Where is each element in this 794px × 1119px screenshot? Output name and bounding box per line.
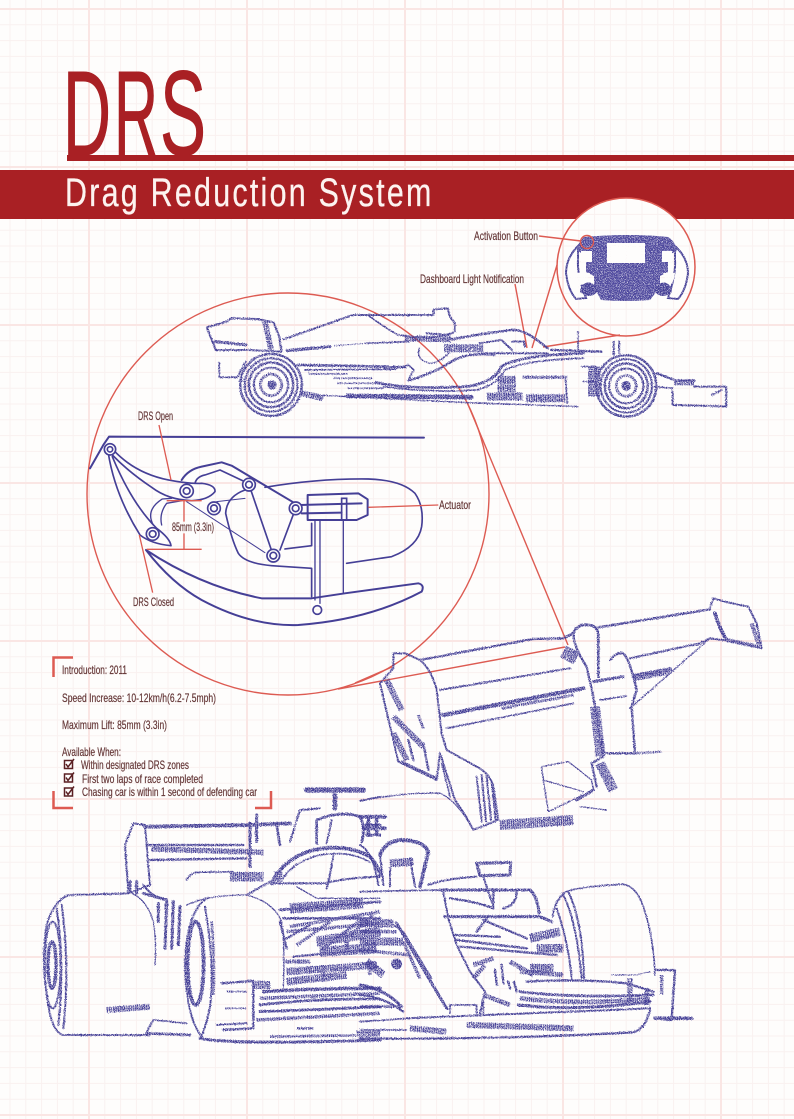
info: maximum lift: Maximum Lift: 85mm (3.3in) [62,718,167,732]
floor [348,396,471,397]
title underline [67,155,794,161]
front wing [527,980,653,992]
checklist item 1: Within designated DRS zones [81,758,189,772]
label: Activation Button: Activation Button [474,229,538,243]
fuselage [265,479,422,563]
upper flap [420,609,710,660]
info block [54,658,271,808]
camera block [360,817,385,835]
wheel lower knobs [580,282,672,296]
title: DRS [63,45,206,181]
front wheel [596,355,656,417]
lever and cooling block [187,872,233,880]
cockpit and sidepod details [280,902,380,918]
diagram: DRS mechanism [90,425,438,625]
checklist item 3: Chasing car is within 1 second of defending car [82,785,257,799]
upper plate [90,437,424,468]
main plane lines [440,643,700,690]
louvres [477,775,496,822]
activation leader [539,236,581,241]
lower element [542,762,593,812]
second pylon [607,653,637,753]
info: available when: Available When: [62,745,121,759]
front view car: right half [360,817,692,1039]
wing endplate [655,970,675,1020]
front wing flaps [263,988,380,992]
nose and front wing [657,373,694,381]
open flap [112,450,215,501]
closed flap [108,453,171,546]
front view car: left half [44,790,380,1042]
red call-outs [139,425,438,593]
wheel side buttons [577,251,675,286]
rear wing close-up [360,598,762,830]
lower main plane [146,550,423,625]
rear tyre [44,893,150,1035]
wheel left grip [566,246,586,299]
label: Dashboard Light Notification: Dashboard Light Notification [420,272,524,286]
label: Actuator: Actuator [439,498,471,512]
links [249,485,296,556]
label: DRS Open: DRS Open [138,409,173,423]
left endplate [380,653,498,830]
front tyre [187,895,284,988]
actuator [300,493,368,520]
wheel body [577,235,677,301]
checklist item 1 [64,758,189,772]
leader lines to rear wing [338,402,568,689]
leader lines to steering wheel [532,265,620,348]
icon: steering wheel [566,235,688,301]
halo right [380,840,428,887]
pivots [104,444,302,562]
title: DRS: R [114,45,158,181]
mirror [477,862,511,876]
barge boards [487,380,566,398]
subtitle band [0,170,794,219]
stipple and floor [107,1007,150,1010]
floor edge [298,365,405,367]
side view car [207,308,726,417]
nose side [397,923,447,1008]
rear wing [207,318,282,352]
info: introduction: Introduction: 2011 [62,663,127,677]
activation button marker [580,236,594,248]
wheel screen [607,243,645,263]
checklist item 2: First two laps of race completed [82,772,203,786]
front right tyre [563,884,655,975]
label: 85mm (3.3in): 85mm (3.3in) [172,520,214,534]
info: speed increase: Speed Increase: 10-12km/h(6.2-7.5mph) [62,691,216,705]
engine cover [284,308,455,339]
right endplate [697,598,762,648]
subtitle band: Drag Reduction System [65,170,431,215]
checklist item 2 [64,772,203,786]
title: DRS: D [63,45,111,181]
title: DRS: S [160,45,206,181]
bottom edge [577,790,593,800]
label: DRS Closed: DRS Closed [133,595,174,609]
info brackets [54,658,271,808]
wheel right grip [668,246,688,299]
central pylon [563,625,598,677]
sidepod [376,353,583,388]
rear wheel [240,354,302,416]
dashboard leader [515,284,527,348]
halo [272,848,380,883]
cockpit and roll hoop [448,330,548,348]
checklist item 3 [64,785,257,799]
bracket [182,462,295,503]
front wing endplate [222,981,253,1030]
magnifier circle: drive detail [87,293,489,695]
rear wing [125,823,150,893]
airbox and camera wing [307,782,363,798]
suspension [440,890,552,922]
magnifier circle: steering wheel [557,198,695,336]
